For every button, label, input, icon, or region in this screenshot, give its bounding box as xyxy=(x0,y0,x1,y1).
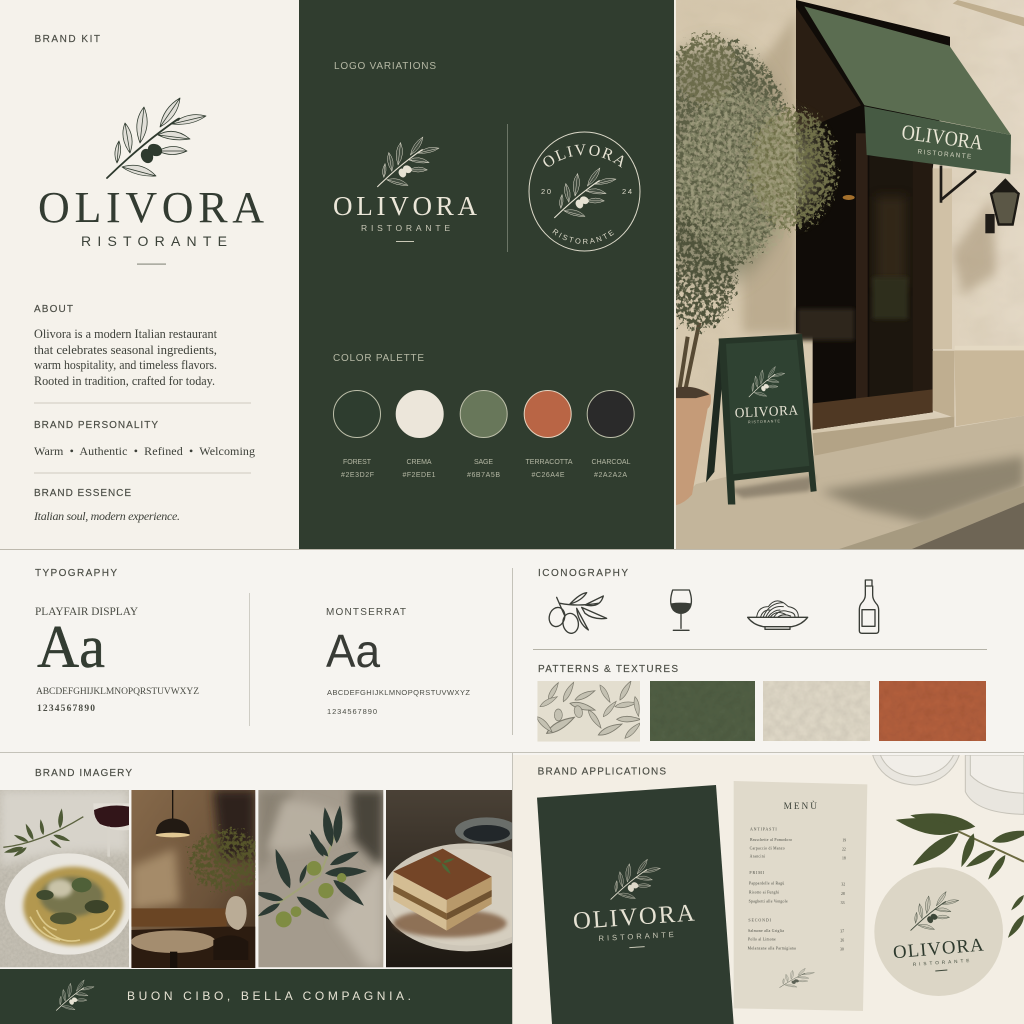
panel: brand applications xyxy=(513,753,1024,1024)
coaster: RISTORANTE xyxy=(913,958,970,967)
menu card: Pollo al Limone xyxy=(748,938,776,942)
menu card: 18 xyxy=(842,856,846,860)
stone step and wall base xyxy=(813,168,1024,457)
menu card: Risotto ai Funghi xyxy=(749,891,779,895)
about block: warm hospitality, and timeless flavors. xyxy=(34,358,217,372)
menu card xyxy=(734,781,867,1011)
icon: branch xyxy=(56,980,94,1010)
icon: wine glass xyxy=(671,590,691,630)
menu card: 32 xyxy=(841,883,845,887)
icon: pasta bowl xyxy=(748,601,808,629)
menu card: 22 xyxy=(842,848,846,852)
swatch: olive leaf pattern xyxy=(535,680,642,742)
swatch: green texture xyxy=(650,681,755,741)
A-frame sidewalk sign: OLIVORA xyxy=(734,402,799,421)
about block: Rooted in tradition, crafted for today. xyxy=(34,374,215,388)
panel: iconography xyxy=(533,568,987,742)
serif typeface specimen: Aa xyxy=(37,614,105,680)
colour names and codes: SAGE xyxy=(474,459,493,466)
logo: circular seal xyxy=(528,132,640,252)
swatch: terracotta texture xyxy=(879,681,986,741)
icon: olive branch xyxy=(107,98,206,178)
serif typeface specimen xyxy=(35,606,199,714)
awning xyxy=(804,6,1011,203)
about block: Olivora is a modern Italian restaurant xyxy=(34,327,218,341)
door xyxy=(798,133,933,430)
banner: tagline xyxy=(0,969,513,1024)
menu card: Melanzane alla Parmigiana xyxy=(748,947,796,951)
about block: that celebrates seasonal ingredients, xyxy=(34,343,217,357)
A-frame sidewalk sign: RISTORANTE xyxy=(748,419,780,424)
primary logo xyxy=(38,98,264,265)
panel: logo variations and palette xyxy=(299,0,674,549)
olive tree and pot xyxy=(633,35,836,505)
colour names and codes: CREMA xyxy=(406,459,432,466)
brand personality block xyxy=(34,420,255,458)
menu card: Salmone alla Griglia xyxy=(748,929,784,933)
icon: bottle xyxy=(859,580,879,633)
about block xyxy=(34,304,220,388)
colour names and codes: TERRACOTTA xyxy=(526,459,573,466)
colour swatches xyxy=(334,390,634,438)
coaster: OLIVORA xyxy=(892,934,985,963)
sans typeface specimen: ABCDEFGHIJKLMNOPQRSTUVWXYZ xyxy=(327,688,470,697)
section label: typography: TYPOGRAPHY xyxy=(35,568,117,579)
menu card: 19 xyxy=(842,839,846,843)
menu card: Pappardelle al Ragù xyxy=(749,882,784,886)
menu card: 33 xyxy=(841,901,845,905)
section label: iconography: ICONOGRAPHY xyxy=(538,568,628,579)
menu card: Carpaccio di Manzo xyxy=(750,846,785,850)
pavement xyxy=(676,416,1024,550)
drinking glasses xyxy=(873,755,1024,814)
brand essence block: Italian soul, modern experience. xyxy=(33,509,180,523)
sans typeface specimen: MONTSERRAT xyxy=(326,607,406,618)
logo: circular seal: OLIVORA xyxy=(543,144,624,168)
A-frame sidewalk sign xyxy=(706,334,817,504)
logo: circular seal: 20 xyxy=(541,187,551,196)
colour names and codes: #F2EDE1 xyxy=(402,472,436,479)
awning: RISTORANTE xyxy=(917,149,972,161)
swatch: cream texture xyxy=(763,681,870,741)
logo: circular seal: RISTORANTE xyxy=(552,228,614,244)
colour names and codes: #C26A4E xyxy=(532,472,565,479)
photo: tiramisu xyxy=(386,790,512,968)
colour names and codes: #2E3D2F xyxy=(341,472,374,479)
menu card: 28 xyxy=(841,892,845,896)
panel: typography xyxy=(35,568,470,726)
menu card: ANTIPASTI xyxy=(750,827,777,832)
photo: olive branch on linen xyxy=(253,790,383,967)
tagline text: BUON CIBO, BELLA COMPAGNIA. xyxy=(127,989,411,1003)
menu card: Bruschette al Pomodoro xyxy=(750,838,792,842)
sans typeface specimen: 1234567890 xyxy=(327,707,377,716)
photo: restaurant interior xyxy=(131,790,263,968)
menu card: MENÙ xyxy=(784,800,817,812)
photo: restaurant storefront xyxy=(676,0,1024,549)
logo subtitle: RISTORANTE xyxy=(81,233,227,249)
section label: brand kit: BRAND KIT xyxy=(34,34,100,45)
menu cover xyxy=(537,785,734,1024)
brand personality block: Warm • Authentic • Refined • Welcoming xyxy=(34,444,255,458)
colour names and codes: #2A2A2A xyxy=(594,472,627,479)
colour names and codes: #6B7A5B xyxy=(467,472,500,479)
logo: horizontal reversed: OLIVORA xyxy=(333,191,478,221)
brand personality block: BRAND PERSONALITY xyxy=(34,420,158,431)
serif typeface specimen: PLAYFAIR DISPLAY xyxy=(35,606,139,618)
colour names and codes xyxy=(341,459,631,479)
menu card: Spaghetti alle Vongole xyxy=(749,900,788,904)
photo: pasta plate xyxy=(0,790,132,967)
sans typeface specimen xyxy=(326,607,470,716)
coaster xyxy=(874,867,1003,996)
menu card: PRIMI xyxy=(749,870,765,875)
serif typeface specimen: 1234567890 xyxy=(37,704,95,714)
brand essence block: BRAND ESSENCE xyxy=(34,488,131,499)
awning: OLIVORA xyxy=(900,121,984,155)
sans typeface specimen: Aa xyxy=(326,625,380,677)
logo: horizontal reversed xyxy=(333,137,478,242)
wordmark: OLIVORA xyxy=(38,183,264,232)
about block: ABOUT xyxy=(34,304,73,315)
section label: color palette: COLOR PALETTE xyxy=(333,353,424,364)
olive sprig xyxy=(894,808,1024,940)
section label: brand imagery: BRAND IMAGERY xyxy=(35,768,132,779)
section label: logo variations: LOGO VARIATIONS xyxy=(334,61,436,72)
menu card: Arancini xyxy=(750,855,765,859)
panel: brand kit introduction xyxy=(0,0,298,549)
section label: brand applications: BRAND APPLICATIONS xyxy=(538,767,666,778)
brand essence block xyxy=(33,488,180,523)
icon: olives xyxy=(547,593,607,635)
logo: circular seal: 24 xyxy=(622,187,632,196)
logo: horizontal reversed: RISTORANTE xyxy=(361,223,450,233)
wall lantern xyxy=(985,178,1019,233)
menu card: 30 xyxy=(840,948,844,952)
menu card: 26 xyxy=(840,939,844,943)
colour names and codes: CHARCOAL xyxy=(592,459,631,466)
menu card: SECONDI xyxy=(748,918,772,923)
colour names and codes: FOREST xyxy=(343,459,372,466)
section label: patterns and textures: PATTERNS & TEXTURES xyxy=(538,664,678,675)
logo dash xyxy=(137,264,166,265)
menu cover: RISTORANTE xyxy=(598,930,674,943)
panel: brand imagery xyxy=(0,768,512,968)
serif typeface specimen: ABCDEFGHIJKLMNOPQRSTUVWXYZ xyxy=(36,687,199,697)
menu cover: OLIVORA xyxy=(572,900,696,935)
menu card: 37 xyxy=(840,930,844,934)
